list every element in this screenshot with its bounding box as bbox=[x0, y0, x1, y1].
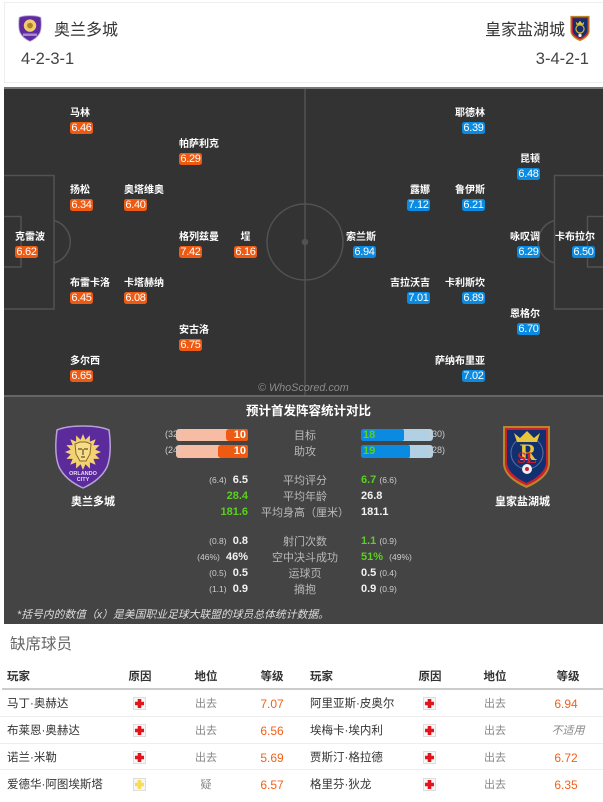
table row 1: 马丁·奥赫达 bbox=[7, 698, 68, 710]
table row 2 bbox=[0, 717, 603, 744]
table row 3: 5.69 bbox=[260, 751, 284, 765]
table row 3: 诺兰·米勒 bbox=[7, 752, 57, 764]
stat row: 平均评分 bbox=[209, 474, 397, 487]
player: 索兰斯: 索兰斯 bbox=[346, 232, 376, 243]
player: 卡布拉尔 bbox=[555, 230, 595, 258]
player: 格列兹曼: 7.42 bbox=[180, 246, 201, 258]
bar: away assists bbox=[361, 445, 445, 458]
table row 2: 埃梅卡·埃内利 bbox=[310, 725, 383, 737]
table row 3: 贾斯汀·格拉德 bbox=[310, 752, 383, 764]
player: 咏叹调: 6.29 bbox=[518, 246, 539, 258]
table header: 地位 bbox=[194, 671, 218, 683]
player: 萨纳布里亚: 萨纳布里亚 bbox=[435, 356, 485, 367]
player: 马林: 6.46 bbox=[71, 122, 92, 134]
player: 露娜: 露娜 bbox=[410, 185, 430, 196]
stat row: 平均身高（厘米）: 平均身高（厘米） bbox=[261, 507, 349, 519]
table row 1: 7.07 bbox=[260, 697, 284, 711]
stat row: 射门次数: 射门次数 bbox=[283, 536, 327, 548]
stat row: 空中决斗成功: (46%) 46% bbox=[197, 551, 248, 563]
table header: 玩家 bbox=[310, 671, 333, 683]
heading: missing players: 缺席球员 bbox=[10, 636, 72, 653]
stat row: 摘抱: (1.1) 0.9 bbox=[209, 583, 248, 595]
player: 萨纳布里亚 bbox=[435, 355, 485, 382]
player: 恩格尔: 6.70 bbox=[518, 323, 539, 335]
home team name: 奥兰多城 bbox=[54, 22, 118, 39]
table row 4: 爱德华·阿图埃斯塔 bbox=[7, 779, 103, 791]
panel: lineup stats comparison bbox=[4, 397, 603, 624]
player: 多尔西: 6.65 bbox=[71, 370, 92, 382]
stat row: 平均年龄: 平均年龄 bbox=[283, 491, 327, 503]
player: 卡塔赫纳 bbox=[124, 277, 164, 304]
table header: 地位 bbox=[484, 671, 506, 683]
footnote: *括号内的数值（x）是美国职业足球大联盟的球员总体统计数据。 bbox=[17, 609, 329, 621]
stat row: 平均评分: 平均评分 bbox=[283, 475, 327, 487]
player: 恩格尔 bbox=[510, 308, 540, 335]
stat row: 平均身高（厘米）: 181.6 bbox=[220, 506, 248, 518]
stat row: 空中决斗成功 bbox=[197, 551, 412, 564]
table header: 等级 bbox=[556, 671, 580, 683]
stat row: 平均身高（厘米） bbox=[220, 506, 389, 519]
bar: home assists: (24) bbox=[165, 445, 181, 455]
stat row: 平均身高（厘米）: 181.1 bbox=[361, 506, 389, 518]
icon: Orlando City crest large bbox=[55, 425, 111, 489]
player: 马林 bbox=[70, 107, 93, 134]
player: 安古洛: 6.75 bbox=[180, 339, 201, 351]
table header: 玩家 bbox=[7, 671, 30, 683]
stat row: 射门次数 bbox=[209, 535, 397, 548]
match header bbox=[4, 2, 603, 83]
player: 吉拉沃吉: 7.01 bbox=[408, 292, 429, 304]
table header: 等级 bbox=[260, 671, 284, 683]
away team label: 皇家盐湖城 bbox=[495, 496, 550, 508]
stat row: 运球页: 运球页 bbox=[288, 568, 322, 580]
player: 帕萨利克: 6.29 bbox=[180, 153, 201, 165]
icon: Real Salt Lake crest large: SL bbox=[517, 450, 537, 467]
table row 3 bbox=[0, 744, 603, 770]
stat label: 目标: 目标 bbox=[294, 430, 316, 442]
stat row: 射门次数: (0.8) 0.8 bbox=[209, 535, 248, 547]
player: 扬松: 6.34 bbox=[71, 199, 92, 211]
player: 布雷卡洛 bbox=[70, 277, 110, 304]
player: 多尔西 bbox=[70, 355, 100, 382]
player: 埕 bbox=[234, 231, 257, 258]
player: 露娜: 7.12 bbox=[408, 199, 429, 211]
player: 鲁伊斯 bbox=[455, 184, 485, 211]
table row 4: 出去 bbox=[484, 779, 506, 791]
stat row: 摘抱: 摘抱 bbox=[294, 584, 316, 596]
panel: pitch bbox=[4, 87, 603, 397]
player: 奥塔维奥: 6.40 bbox=[125, 199, 146, 211]
stat row: 运球页: 0.5 (0.4) bbox=[361, 567, 397, 579]
player: 昆顿: 昆顿 bbox=[520, 154, 540, 165]
stat row: 运球页: (0.5) 0.5 bbox=[209, 567, 248, 579]
player: 萨纳布里亚: 7.02 bbox=[463, 370, 484, 382]
bar: away assists: (28) bbox=[429, 445, 445, 455]
stat row: 运球页 bbox=[209, 567, 397, 580]
table row 3: 出去 bbox=[195, 752, 217, 764]
player: 昆顿 bbox=[517, 153, 540, 180]
table row 4 bbox=[7, 778, 578, 792]
icon: Real Salt Lake crest large bbox=[503, 426, 550, 488]
stat row: 平均评分: 6.7 (6.6) bbox=[361, 474, 397, 486]
player: 多尔西: 多尔西 bbox=[70, 356, 100, 367]
icon: Real Salt Lake crest small bbox=[570, 16, 590, 42]
player: 扬松: 扬松 bbox=[70, 185, 90, 196]
player: 扬松 bbox=[70, 184, 93, 211]
player: 埕: 埕 bbox=[240, 232, 250, 243]
watermark: © WhoScored.com bbox=[258, 382, 349, 394]
player: 卡塔赫纳: 卡塔赫纳 bbox=[124, 278, 164, 289]
player: 安古洛: 安古洛 bbox=[179, 325, 209, 336]
stat row: 空中决斗成功: 空中决斗成功 bbox=[272, 552, 338, 564]
home formation: 4-2-3-1 bbox=[21, 50, 74, 68]
player: 奥塔维奥 bbox=[124, 184, 164, 211]
icon: Orlando City crest large: CITY bbox=[77, 477, 90, 483]
table row 2: 布莱恩·奥赫达 bbox=[7, 725, 80, 737]
player: 鲁伊斯: 6.21 bbox=[463, 199, 484, 211]
player: 奥塔维奥: 奥塔维奥 bbox=[124, 185, 164, 196]
player: 吉拉沃吉: 吉拉沃吉 bbox=[390, 278, 430, 289]
player: 卡利斯坎: 卡利斯坎 bbox=[445, 278, 485, 289]
player: 克雷波 bbox=[15, 231, 45, 258]
bar: home assists: 10 bbox=[234, 445, 246, 457]
player: 咏叹调: 咏叹调 bbox=[510, 232, 540, 243]
player: 索兰斯 bbox=[346, 231, 376, 258]
player: 卡利斯坎 bbox=[445, 277, 485, 304]
bar: home assists bbox=[165, 445, 248, 458]
table header: 原因 bbox=[128, 671, 152, 683]
table row 4: 6.57 bbox=[260, 778, 284, 792]
table row 1: 出去 bbox=[484, 698, 506, 710]
player: 埕: 6.16 bbox=[235, 246, 256, 258]
player: 布雷卡洛: 6.45 bbox=[71, 292, 92, 304]
player: 卡利斯坎: 6.89 bbox=[463, 292, 484, 304]
table header: 原因 bbox=[418, 671, 442, 683]
stat row: 平均年龄 bbox=[227, 490, 382, 503]
table row 2: 不适用 bbox=[552, 725, 584, 737]
bar: home goals: 10 bbox=[234, 429, 246, 441]
table row 1 bbox=[0, 690, 603, 717]
home team label: 奥兰多城 bbox=[71, 496, 115, 508]
player: 恩格尔: 恩格尔 bbox=[510, 309, 540, 320]
table row 2: 6.56 bbox=[260, 724, 284, 738]
table row 4: 格里芬·狄龙 bbox=[310, 779, 371, 791]
table row 1: 阿里亚斯·皮奥尔 bbox=[310, 698, 394, 710]
icon: Orlando City crest small bbox=[18, 15, 42, 42]
table row 1: 6.94 bbox=[554, 697, 578, 711]
stat row: 摘抱 bbox=[209, 583, 397, 596]
player: 露娜 bbox=[407, 184, 430, 211]
player: 咏叹调 bbox=[510, 231, 540, 258]
player: 马林: 马林 bbox=[70, 108, 90, 119]
table row 2: 出去 bbox=[484, 725, 506, 737]
player: 克雷波: 6.62 bbox=[16, 246, 37, 258]
stat row: 平均年龄: 26.8 bbox=[361, 490, 382, 502]
table row 4: 6.35 bbox=[554, 778, 578, 792]
player: 帕萨利克: 帕萨利克 bbox=[179, 139, 219, 150]
player: 耶德林: 耶德林 bbox=[455, 108, 485, 119]
bar: away goals bbox=[361, 429, 445, 441]
player: 安古洛 bbox=[179, 324, 209, 351]
player: 耶德林 bbox=[455, 107, 485, 134]
player: 格列兹曼 bbox=[179, 231, 219, 258]
stat row: 摘抱: 0.9 (0.9) bbox=[361, 583, 397, 595]
player: 鲁伊斯: 鲁伊斯 bbox=[455, 185, 485, 196]
icon: Orlando City crest large: ORLANDO bbox=[69, 471, 98, 477]
player: 吉拉沃吉 bbox=[390, 276, 430, 304]
player: 昆顿: 6.48 bbox=[518, 168, 539, 180]
away team name: 皇家盐湖城 bbox=[485, 22, 565, 39]
stat label: 助攻: 助攻 bbox=[294, 446, 316, 458]
table row 4: 疑 bbox=[200, 779, 212, 791]
table row 3: 6.72 bbox=[554, 751, 578, 765]
player: 卡塔赫纳: 6.08 bbox=[125, 292, 146, 304]
player: 克雷波: 克雷波 bbox=[15, 232, 45, 243]
bar: away goals: (30) bbox=[429, 429, 445, 439]
player: 布雷卡洛: 布雷卡洛 bbox=[70, 278, 110, 289]
bar: away goals: 18 bbox=[363, 429, 375, 441]
stat row: 空中决斗成功: 51% (49%) bbox=[361, 551, 412, 563]
icon: Real Salt Lake crest large: R bbox=[520, 440, 537, 465]
stats heading: 预计首发阵容统计对比 bbox=[246, 404, 371, 418]
player: 耶德林: 6.39 bbox=[463, 122, 484, 134]
stat row: 射门次数: 1.1 (0.9) bbox=[361, 535, 397, 547]
player: 格列兹曼: 格列兹曼 bbox=[179, 232, 219, 243]
player: 索兰斯: 6.94 bbox=[354, 246, 375, 258]
stat row: 平均年龄: 28.4 bbox=[227, 490, 248, 502]
table row 2: 出去 bbox=[195, 725, 217, 737]
table row 1: 出去 bbox=[195, 698, 217, 710]
player: 帕萨利克 bbox=[179, 138, 219, 165]
player: 卡布拉尔: 卡布拉尔 bbox=[555, 232, 595, 243]
player: 卡布拉尔: 6.50 bbox=[573, 246, 594, 258]
bar: home goals bbox=[165, 429, 248, 441]
bar: away assists: 19 bbox=[363, 445, 375, 457]
away formation: 3-4-2-1 bbox=[536, 50, 589, 68]
bar: home goals: (32) bbox=[165, 429, 181, 439]
table row 3: 出去 bbox=[484, 752, 506, 764]
stat row: 平均评分: (6.4) 6.5 bbox=[209, 474, 248, 486]
